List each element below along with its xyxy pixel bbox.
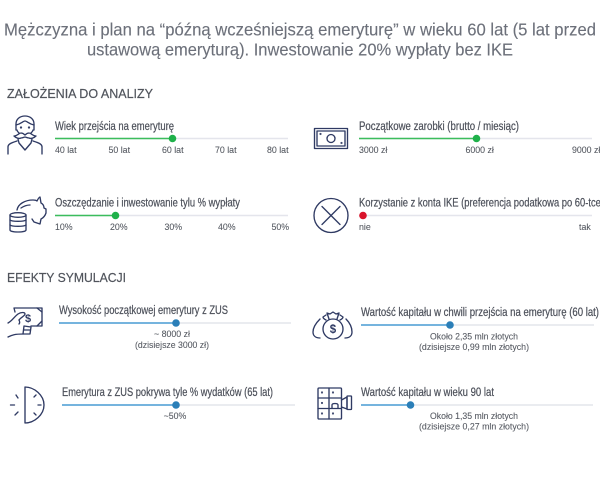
label: Wartość kapitału w wieku 90 lat — [361, 385, 494, 399]
icon: hand with dollar banknote — [8, 308, 42, 337]
icon: safe deposit boxes — [318, 388, 352, 419]
scale labels: 3000 zł — [359, 145, 387, 155]
heading: założenia do analizy: ZAŁOŻENIA DO ANALIZY — [7, 87, 154, 101]
scale labels: 30% — [164, 222, 182, 232]
value text: Około 1,35 mln złotych — [430, 411, 518, 421]
icon: crossed circle — [314, 198, 348, 232]
scale labels: 9000 zł — [572, 145, 600, 155]
value text — [135, 329, 209, 350]
heading: efekty symulacji: EFEKTY SYMULACJI — [7, 271, 126, 285]
scale labels: 6000 zł — [466, 145, 494, 155]
panel: wiek przejścia na emeryturę — [8, 116, 289, 155]
label: Początkowe zarobki (brutto / miesiąc) — [359, 119, 519, 133]
slider — [59, 319, 291, 327]
panel: wartość kapitału przy przejściu — [313, 305, 599, 352]
icon: money bags — [313, 312, 352, 339]
slider — [55, 135, 288, 142]
panel: oszczędzanie i inwestowanie — [10, 196, 289, 232]
value text: (dzisiejsze 0,99 mln złotych) — [419, 342, 529, 352]
icon: money bags: $ — [330, 324, 337, 336]
value text: Około 2,35 mln złotych — [430, 332, 518, 342]
scale labels — [359, 145, 600, 155]
scale labels: 20% — [110, 222, 128, 232]
value text: (dzisiejsze 3000 zł) — [135, 340, 209, 350]
label: Oszczędzanie i inwestowanie tylu % wypłaty — [55, 196, 241, 210]
scale labels: 50 lat — [108, 145, 131, 155]
label: Emerytura z ZUS pokrywa tyle % wydatków (65 lat) — [62, 385, 273, 399]
icon: piggy bank with coins — [10, 197, 46, 232]
slider — [55, 212, 288, 219]
value text: ~50% — [164, 411, 187, 421]
scale labels: 70 lat — [215, 145, 237, 155]
value text — [419, 411, 529, 432]
label: Wysokość początkowej emerytury z ZUS — [59, 303, 228, 317]
panel: korzystanie z konta IKE — [314, 196, 600, 232]
scale labels: tak — [579, 222, 591, 232]
title: ustawową emeryturą). Inwestowanie 20% wypłaty bez IKE — [87, 40, 513, 60]
slider — [359, 135, 592, 142]
slider — [361, 401, 593, 409]
scale labels — [55, 222, 289, 232]
scale labels: 40 lat — [55, 145, 77, 155]
label: Wiek przejścia na emeryturę — [55, 119, 174, 133]
panel: wysokość początkowej emerytury — [8, 303, 291, 350]
value text — [419, 332, 529, 352]
scale labels: 50% — [272, 222, 289, 232]
panel: emerytura pokrywa wydatki — [10, 385, 295, 423]
slider — [361, 321, 594, 329]
scale labels: nie — [359, 222, 371, 232]
scale labels: 40% — [218, 222, 236, 232]
scale labels: 10% — [55, 222, 73, 232]
value text: (dzisiejsze 0,27 mln złotych) — [419, 422, 529, 432]
scale labels — [359, 222, 591, 232]
panel: wartość kapitału w wieku 90 lat — [318, 385, 593, 432]
value text: ~ 8000 zł — [154, 329, 190, 339]
icon: hand with dollar banknote: $ — [25, 313, 31, 325]
slider — [359, 212, 592, 219]
title — [4, 20, 596, 60]
scale labels: 80 lat — [267, 145, 289, 155]
scale labels — [55, 145, 289, 155]
slider — [62, 401, 295, 409]
icon: old man with moustache — [8, 116, 42, 154]
icon: banknote — [314, 128, 348, 148]
scale labels: 60 lat — [162, 145, 184, 155]
panel: początkowe zarobki — [314, 119, 600, 155]
icon: half clock — [10, 387, 44, 423]
